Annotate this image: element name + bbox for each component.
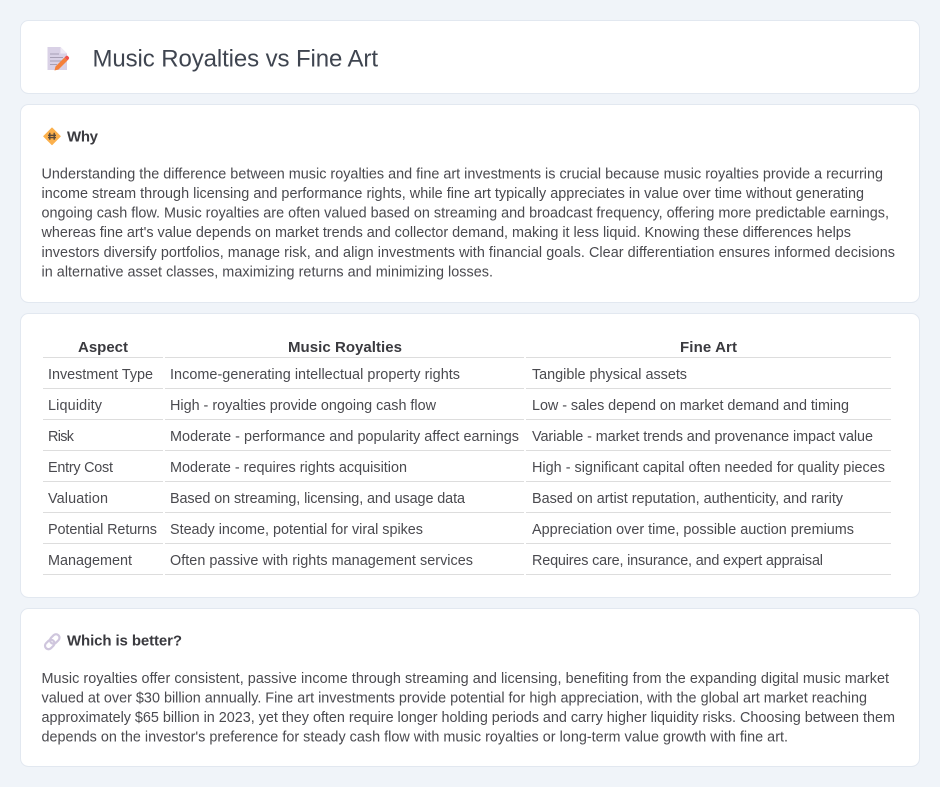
- row: entry cost: Entry Cost: [48, 460, 113, 476]
- heading: why: Why: [67, 128, 99, 146]
- text block: verdict: valued at over $30 billion annually. Fine art investments provide potential for high appreciation, with the global art market reaching: [42, 690, 867, 706]
- text block: why explanation: [40, 166, 895, 280]
- panel: comparison table: [20, 314, 920, 598]
- row: liquidity: Liquidity: [48, 398, 103, 414]
- row: risk: Moderate - performance and popularity affect earnings: [170, 429, 519, 445]
- row: entry cost: High - significant capital often needed for quality pieces: [532, 460, 885, 476]
- title: Music Royalties vs Fine Art: [92, 46, 378, 72]
- table header row: Music Royalties: [288, 339, 402, 356]
- row: risk: Variable - market trends and provenance impact value: [532, 429, 873, 445]
- row: potential returns: Appreciation over time, possible auction premiums: [532, 522, 854, 538]
- row: liquidity: High - royalties provide ongoing cash flow: [170, 398, 437, 414]
- text block: verdict: approximately $65 billion in 2023, yet they often require longer holding periods and carry higher liquidity risks. Choosing between them: [42, 710, 895, 726]
- table header row: Fine Art: [680, 339, 737, 356]
- heading: which is better: Which is better?: [67, 632, 182, 650]
- icon: memo with pencil: [48, 47, 69, 70]
- row: management: Often passive with rights management services: [170, 553, 473, 569]
- text block: verdict: depends on the investor's preference for steady cash flow with music royalties or long-term value growth with fine art.: [42, 730, 788, 746]
- table header row: [43, 339, 891, 358]
- table header row: Aspect: [78, 339, 128, 356]
- text block: why explanation: Understanding the difference between music royalties and fine art investments is crucial because music royalties provide a recurring: [42, 166, 883, 182]
- text block: verdict: [42, 671, 895, 746]
- icon: orange warning diamond: [44, 128, 60, 145]
- row: investment type: Income-generating intellectual property rights: [170, 367, 460, 383]
- row: investment type: Tangible physical assets: [532, 367, 687, 383]
- row: risk: Risk: [48, 429, 75, 445]
- panel: which is better: [20, 608, 920, 766]
- row: investment type: Investment Type: [48, 367, 153, 383]
- row: valuation: Based on artist reputation, authenticity, and rarity: [532, 491, 844, 507]
- text block: why explanation: ongoing cash flow. Music royalties are often valued based on streaming and broadcast frequency, offering more predictable earnings,: [42, 206, 889, 222]
- text block: why explanation: whereas fine art's value depends on market trends and collector demand, making it less liquid. Knowing these differences helps: [40, 225, 851, 241]
- panel: why: [20, 104, 920, 302]
- text block: why explanation: in alternative asset classes, maximizing returns and minimizing losses.: [42, 264, 493, 280]
- text block: why explanation: income stream through licensing and performance rights, while fine art typically appreciates in value over time without generating: [42, 186, 864, 202]
- row: potential returns: Steady income, potential for viral spikes: [170, 522, 423, 538]
- row: liquidity: [43, 398, 891, 420]
- row: risk: [43, 429, 891, 450]
- row: valuation: Based on streaming, licensing, and usage data: [170, 491, 465, 507]
- row: management: Management: [48, 553, 132, 569]
- panel: title header: [20, 20, 920, 94]
- row: valuation: Valuation: [48, 491, 108, 507]
- row: management: [43, 553, 891, 574]
- row: valuation: [43, 491, 891, 512]
- row: management: Requires care, insurance, and expert appraisal: [532, 553, 823, 569]
- row: potential returns: [43, 522, 891, 544]
- row: entry cost: [43, 460, 891, 482]
- row: entry cost: Moderate - requires rights acquisition: [170, 460, 407, 476]
- text block: verdict: Music royalties offer consistent, passive income through streaming and licensing, benefiting from the expanding digital music market: [42, 671, 889, 687]
- text block: why explanation: investors diversify portfolios, manage risk, and align investments with financial goals. Clear differentiation ensures informed decisions: [42, 245, 895, 261]
- row: investment type: [43, 367, 891, 388]
- icon: chain link: [44, 633, 61, 651]
- row: liquidity: Low - sales depend on market demand and timing: [532, 398, 849, 414]
- row: potential returns: Potential Returns: [48, 522, 157, 538]
